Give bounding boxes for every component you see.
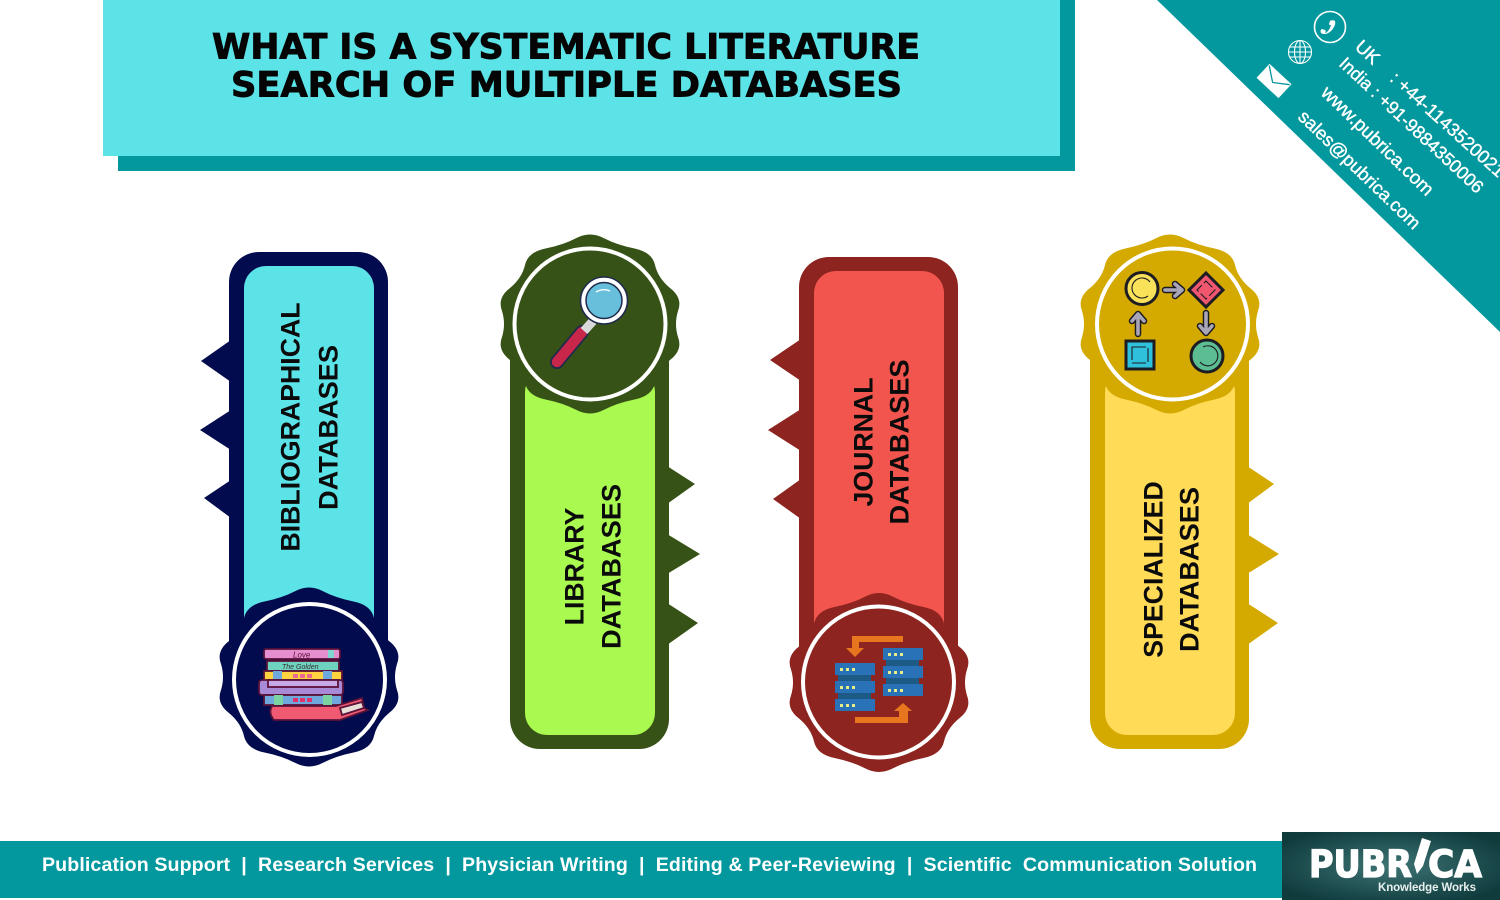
panel: specialized databases bbox=[1081, 234, 1279, 749]
contact corner panel bbox=[1157, 0, 1500, 332]
logo tagline: Knowledge Works bbox=[1378, 882, 1476, 894]
panel: journal databases bbox=[768, 257, 968, 772]
panel 3 label: JOURNAL bbox=[848, 378, 878, 506]
icon: process flow bbox=[1126, 272, 1223, 372]
icon: globe bbox=[1288, 40, 1312, 64]
logo: Pubrica bbox=[1282, 832, 1500, 900]
logo wordmark: CA bbox=[1428, 843, 1482, 886]
icon: exchanging servers bbox=[835, 636, 923, 723]
contact details bbox=[1294, 36, 1500, 233]
icon: envelope bbox=[1257, 64, 1291, 98]
icon: stack of books bbox=[259, 649, 368, 720]
title text bbox=[212, 28, 920, 106]
panel 1 label bbox=[276, 302, 344, 552]
panel 3 tab body bbox=[768, 257, 958, 697]
panel 4 tab body bbox=[1090, 330, 1279, 749]
panel 3 label: DATABASES bbox=[884, 360, 914, 524]
panel 2 tab body bbox=[510, 330, 700, 749]
title banner bbox=[103, 0, 1075, 171]
panel 3 badge bbox=[790, 593, 968, 772]
panel 1 badge bbox=[220, 588, 398, 766]
panel 3 label bbox=[848, 360, 914, 524]
title text: SEARCH OF MULTIPLE DATABASES bbox=[231, 66, 902, 106]
panel: library databases bbox=[501, 234, 700, 749]
logo wordmark bbox=[1309, 843, 1482, 886]
panel: bibliographical databases bbox=[200, 252, 398, 766]
contact details: India : +91-9884350006 bbox=[1335, 53, 1488, 197]
logo wordmark: PUBR bbox=[1309, 843, 1412, 886]
panel 4 label bbox=[1138, 481, 1204, 658]
title text: WHAT IS A SYSTEMATIC LITERATURE bbox=[212, 28, 920, 68]
panel 2 label: LIBRARY bbox=[560, 507, 590, 625]
panel 2 label bbox=[560, 484, 626, 649]
panel 4 label: SPECIALIZED bbox=[1138, 481, 1168, 658]
icon: pencil bbox=[1414, 838, 1431, 874]
icon: magnifying glass bbox=[557, 277, 628, 362]
panel 1 label: BIBLIOGRAPHICAL bbox=[276, 302, 306, 552]
panel 1 tab body bbox=[200, 252, 388, 692]
panel 4 label: DATABASES bbox=[1174, 487, 1204, 652]
footer bar bbox=[0, 841, 1282, 898]
footer services text: Publication Support | Research Services | Physician Writing | Editing & Peer-Reviewing | Scientific Communication Solution bbox=[42, 854, 1257, 876]
icon: phone bbox=[1314, 12, 1346, 42]
icon: stack of books: Love bbox=[293, 650, 311, 660]
contact details: sales@pubrica.com bbox=[1294, 106, 1425, 233]
panel 4 badge bbox=[1081, 234, 1259, 414]
contact details: UK bbox=[1351, 36, 1385, 69]
icon: stack of books: The Golden bbox=[282, 664, 319, 671]
panel 2 badge bbox=[501, 234, 679, 414]
panel 1 label: DATABASES bbox=[314, 345, 344, 510]
contact details: www.pubrica.com bbox=[1316, 82, 1438, 200]
panel 2 label: DATABASES bbox=[596, 484, 626, 649]
